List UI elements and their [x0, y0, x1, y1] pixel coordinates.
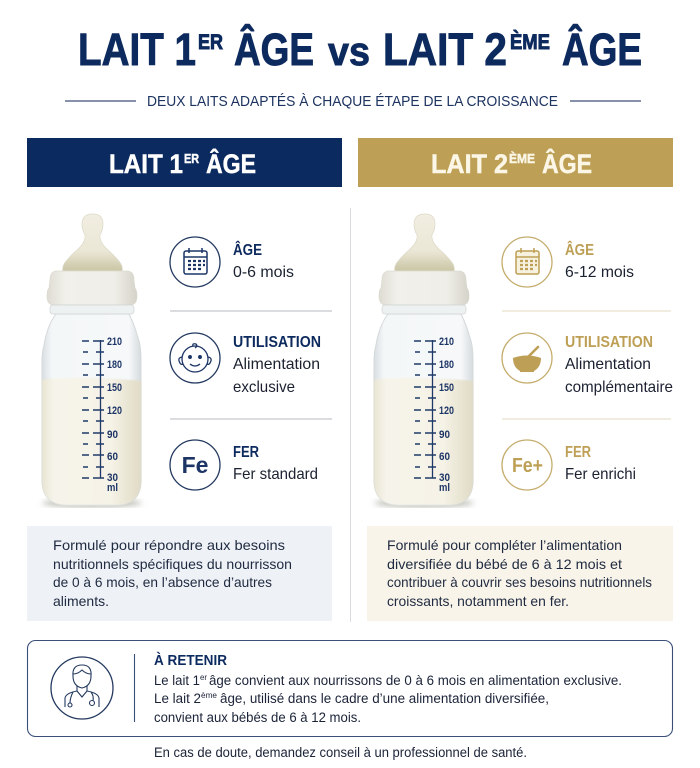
row: utilisation right: UTILISATION	[565, 334, 653, 351]
row: fer left: Fer standard	[233, 466, 318, 483]
row: utilisation left: exclusive	[233, 379, 295, 396]
bottle scale: ml	[107, 482, 118, 494]
callout: a retenir: Le lait 1	[154, 673, 200, 688]
bottle scale: 210	[107, 336, 122, 348]
title: vs	[328, 30, 370, 74]
panel: description lait 2eme age	[367, 526, 673, 621]
header: lait 2eme age: ÈME	[509, 151, 535, 166]
header: lait 1er age: LAIT 1	[109, 149, 183, 179]
bottle scale: 90	[107, 429, 118, 441]
callout: a retenir: âge, utilisé dans le cadre d’une alimentation diversifiée,	[220, 691, 549, 706]
callout: a retenir: Le lait 2	[154, 691, 201, 706]
callout: a retenir: À RETENIR	[154, 652, 227, 669]
bottle scale	[82, 336, 122, 494]
row: age left: ÂGE	[233, 240, 262, 259]
row: fer left	[170, 440, 318, 490]
row: age left	[170, 237, 294, 287]
icon: baby face	[170, 333, 220, 383]
bottle scale: 150	[439, 382, 454, 394]
header: lait 2eme age	[358, 138, 673, 187]
header: lait 1er age	[27, 138, 342, 187]
row: age right: 6-12 mois	[565, 264, 634, 281]
bottle scale	[414, 336, 454, 494]
bottle: left	[42, 214, 142, 507]
callout: a retenir	[28, 640, 672, 736]
bottle scale: 30	[107, 472, 118, 484]
panel: description lait 2eme age: diversifiée du bébé de 6 à 12 mois et	[387, 556, 622, 572]
callout: a retenir: ème	[201, 691, 218, 700]
header: lait 1er age: ER	[184, 151, 200, 166]
bottle scale: 180	[107, 359, 122, 371]
icon: doctor	[51, 657, 113, 719]
title: LAIT 2	[383, 24, 507, 75]
panel: description lait 1er age: nutritionnels spécifiques du nourrisson	[53, 556, 292, 572]
row: utilisation right: complémentaire	[565, 379, 673, 396]
bottle scale: 210	[439, 336, 454, 348]
row: utilisation left: UTILISATION	[233, 334, 321, 351]
callout: a retenir: er	[200, 673, 207, 682]
panel: description lait 2eme age: Formulé pour compléter l’alimentation	[387, 537, 622, 553]
row: fer left: FER	[233, 444, 259, 461]
bottle scale: 120	[107, 405, 122, 417]
panel: description lait 1er age: aliments.	[53, 593, 109, 609]
row: utilisation right: Alimentation	[565, 356, 651, 373]
title: ÈME	[510, 31, 550, 54]
row: fer right: FER	[565, 444, 591, 461]
row: utilisation left: Alimentation	[233, 356, 320, 373]
icon: Fe	[170, 440, 220, 490]
bottle scale: 60	[107, 451, 118, 463]
header: lait 2eme age: LAIT 2	[431, 149, 508, 179]
title: ER	[198, 31, 223, 54]
bottle scale: 180	[439, 359, 454, 371]
bottle scale: 30	[439, 472, 450, 484]
bottle scale: 60	[439, 451, 450, 463]
title: LAIT 1	[78, 24, 196, 75]
title: ÂGE	[562, 24, 642, 75]
icon: Fe: Fe	[182, 452, 208, 478]
panel: description lait 1er age	[27, 526, 332, 621]
icon: calendar gold	[502, 237, 552, 287]
row: age left: 0-6 mois	[233, 264, 294, 281]
footer note: En cas de doute, demandez conseil à un professionnel de santé.	[154, 745, 527, 760]
panel: description lait 1er age: Formulé pour répondre aux besoins	[53, 537, 285, 553]
icon: Fe+: Fe+	[512, 455, 543, 477]
bottle scale: 150	[107, 382, 122, 394]
icon: calendar	[170, 237, 220, 287]
panel: description lait 2eme age: contribuer à couvrir ses besoins nutritionnels	[387, 574, 652, 590]
title: ÂGE	[234, 24, 314, 75]
callout: a retenir: âge convient aux nourrissons de 0 à 6 mois en alimentation exclusive.	[209, 673, 622, 688]
row: age right: ÂGE	[565, 240, 594, 259]
bottle scale: ml	[439, 482, 450, 494]
bottle: right	[374, 214, 474, 507]
bottle scale: 90	[439, 429, 450, 441]
row: fer right: Fer enrichi	[565, 466, 636, 483]
subtitle: DEUX LAITS ADAPTÉS À CHAQUE ÉTAPE DE LA CROISSANCE	[147, 93, 558, 110]
row: utilisation left	[170, 333, 321, 396]
header: lait 1er age: ÂGE	[206, 148, 256, 179]
panel: description lait 1er age: de 0 à 6 mois, en l’absence d’autres	[53, 574, 272, 590]
header: lait 2eme age: ÂGE	[542, 148, 592, 179]
bottle scale: 120	[439, 405, 454, 417]
callout: a retenir: convient aux bébés de 6 à 12 mois.	[154, 710, 361, 725]
row: age right	[502, 237, 634, 287]
row: fer right	[502, 440, 636, 490]
icon: bowl and spoon	[502, 333, 552, 383]
panel: description lait 2eme age: croissants, notamment en fer.	[387, 593, 569, 609]
row: utilisation right	[502, 333, 673, 396]
title	[78, 24, 642, 75]
